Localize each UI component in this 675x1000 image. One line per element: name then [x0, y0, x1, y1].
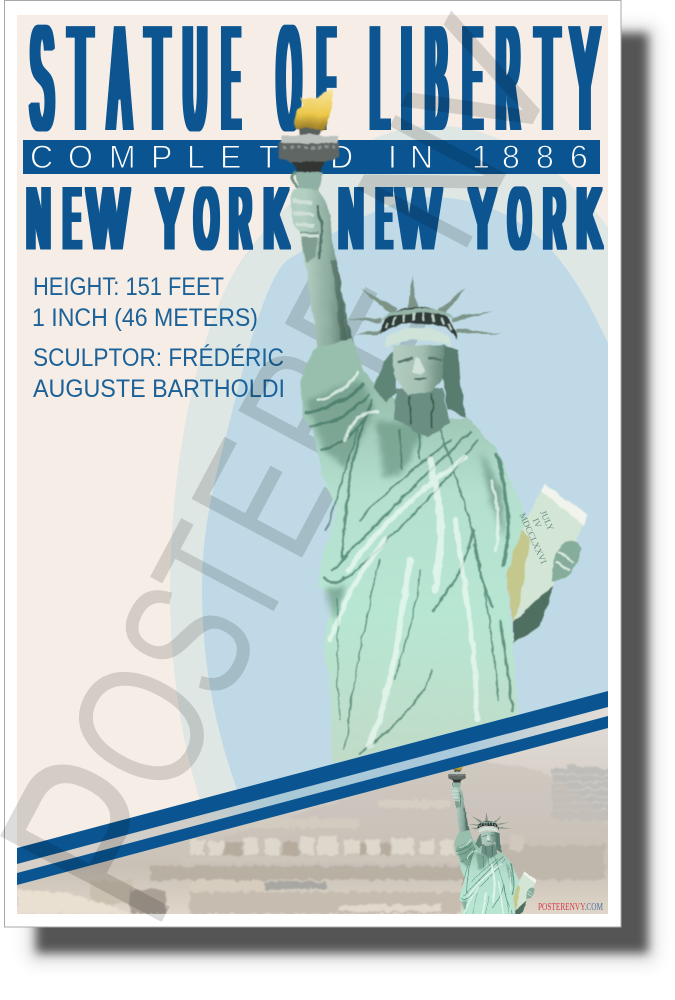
location heading: E: [377, 171, 391, 267]
location heading: Y: [157, 171, 182, 267]
torch flame: [295, 88, 332, 131]
small statue in city photo: [448, 766, 536, 914]
facts text block: 1 INCH (46 METERS): [32, 304, 258, 332]
location heading: K: [264, 171, 288, 267]
watermark: N: [316, 86, 546, 277]
facts text block: HEIGHT: 151 FEET: [33, 273, 224, 301]
text: K: [577, 171, 601, 267]
location heading: N: [27, 171, 50, 267]
watermark: E: [151, 410, 374, 586]
location heading: W: [88, 171, 128, 267]
location heading: Y: [470, 171, 495, 267]
watermark: S: [77, 554, 297, 725]
hair: [373, 350, 396, 402]
location heading: O: [195, 171, 218, 267]
robe: [300, 338, 528, 770]
crown: [380, 307, 457, 348]
apartment tower: [551, 764, 611, 820]
neck: [395, 388, 450, 438]
panel: artwork background: [17, 15, 608, 914]
logo: posterenvy.com: POSTERENVY.COM: [538, 902, 603, 913]
band between stripes: [17, 707, 608, 873]
watermark: E: [244, 231, 469, 411]
location heading: R: [230, 171, 251, 267]
watermark: R: [198, 318, 423, 497]
location heading: O: [509, 171, 530, 267]
book inscription: MDCCLXXVI: [517, 511, 549, 565]
book inscription: JULY: [538, 509, 556, 533]
subtitle banner: COMPLETED IN 1886: [30, 139, 588, 175]
face: [393, 345, 444, 394]
robe dark folds: [306, 383, 512, 753]
location heading: N: [339, 171, 363, 267]
main statue: [278, 88, 588, 770]
facts text block: AUGUSTE BARTHOLDI: [33, 375, 285, 403]
left hand book: [505, 484, 588, 643]
book inscription: IV: [531, 516, 544, 530]
outer pale ellipse: [170, 126, 608, 800]
facts text block: [32, 273, 285, 403]
torch: [278, 129, 340, 192]
crown rays: [347, 275, 502, 335]
watermark: O: [25, 629, 257, 822]
location heading: W: [397, 171, 440, 267]
location heading: E: [64, 171, 80, 267]
inner blue ellipse: [202, 197, 608, 815]
robe light folds: [318, 372, 498, 745]
location heading: R: [544, 171, 565, 267]
robe shadow patches: [305, 380, 505, 620]
blue diagonal stripes: [17, 691, 608, 885]
watermark: T: [114, 497, 328, 656]
facts text block: SCULPTOR: FRÉDÉRIC: [33, 343, 284, 372]
raised arm and hand: [290, 188, 356, 352]
city photo: [17, 728, 611, 914]
row of houses: [190, 836, 454, 855]
